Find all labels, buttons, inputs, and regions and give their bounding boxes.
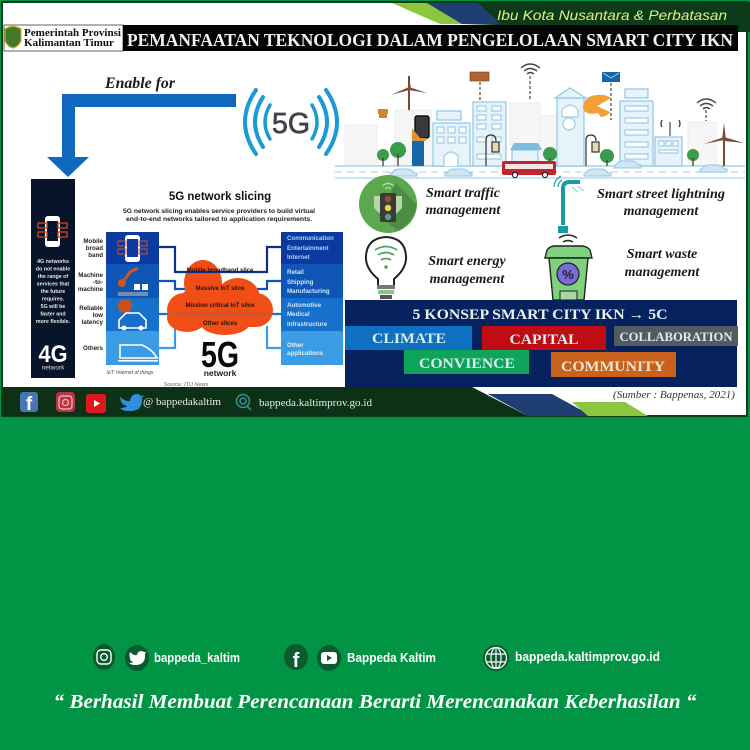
footer social row	[93, 644, 660, 672]
icon: smart waste bin: %	[562, 267, 574, 282]
orange sun	[583, 95, 611, 117]
hand with tablet	[412, 116, 429, 166]
slicing description: end-to-end networks tailored to application requirements.	[126, 216, 312, 223]
icon: instagram badge	[93, 644, 115, 670]
social handle: @ bappedakaltim	[143, 397, 221, 408]
4G description: 5G will be	[41, 304, 65, 310]
5G network wordmark: 5G	[201, 334, 239, 375]
panel: 5C concepts	[345, 300, 738, 387]
icon: smart energy bulb	[366, 237, 406, 299]
channel text: Bappeda Kaltim	[347, 650, 436, 665]
title: PEMANFAATAN TEKNOLOGI DALAM PENGELOLAAN SMART CITY IKN	[127, 30, 733, 50]
street lamps	[486, 135, 599, 166]
cars	[390, 161, 727, 176]
handle text: bappeda_kaltim	[154, 650, 240, 665]
icon: youtube badge	[317, 645, 341, 671]
application column: Internet	[287, 254, 310, 261]
website text: bappeda.kaltimprov.go.id	[515, 649, 660, 664]
5G wordmark: 5G	[272, 108, 310, 140]
icon: facebook badge: f	[293, 650, 300, 672]
use-case labels: Others	[83, 345, 104, 352]
city illustration	[335, 64, 745, 178]
icon: facebook badge	[284, 644, 308, 672]
slicing description: 5G network slicing enables service providers to build virtual	[123, 208, 315, 215]
tag: climate: CLIMATE	[372, 331, 446, 347]
mobile slice line	[159, 247, 281, 272]
label: smart energy: Smart energy	[428, 254, 506, 269]
slice labels: Mobile broadband slice	[187, 268, 254, 274]
4G wordmark: 4G	[38, 341, 68, 368]
chart: 5G network slicing	[78, 191, 343, 388]
use-case labels: Reliable	[79, 305, 104, 312]
plug icon	[378, 109, 388, 118]
use-case labels: latency	[82, 319, 104, 326]
bottom social banner	[2, 387, 648, 416]
label: smart street lighting: management	[624, 204, 699, 219]
label: smart waste: Smart waste	[627, 247, 697, 262]
slicing heading: 5G network slicing	[169, 191, 271, 203]
label: smart traffic: Smart traffic	[426, 186, 501, 201]
4G description: the future	[41, 289, 65, 295]
icon: web	[236, 394, 251, 410]
signs and wifi	[470, 64, 716, 136]
tag: community: COMMUNITY	[561, 359, 665, 375]
website: bappeda.kaltimprov.go.id	[259, 398, 373, 409]
application column: Communication	[287, 235, 334, 242]
arrow: 5G to 4G	[47, 94, 236, 177]
source note: (Sumber : Bappenas, 2021)	[613, 390, 736, 401]
icon: train	[118, 345, 158, 362]
icon: facebook	[20, 392, 38, 415]
icon: smart traffic	[359, 175, 417, 233]
label: smart waste: management	[625, 265, 700, 280]
panel: 4G network	[31, 179, 75, 378]
label: smart street lighting: Smart street lightning	[597, 187, 725, 202]
label: smart energy: management	[430, 272, 505, 287]
icon: instagram	[56, 392, 75, 412]
road	[335, 166, 745, 178]
panel heading: 5 KONSEP SMART CITY IKN → 5C	[412, 307, 668, 323]
icon: twitter	[120, 394, 144, 411]
4G description: 4G networks	[37, 259, 69, 265]
4G description: faster and	[40, 312, 66, 318]
network caption: network	[42, 364, 65, 372]
slice connectors	[159, 281, 281, 348]
application column: Automotive	[287, 302, 322, 309]
tag: capital	[482, 326, 606, 350]
government name: Pemerintah Provinsi	[24, 28, 121, 39]
use-case labels: broad	[86, 245, 103, 252]
4G description: the range of	[38, 274, 68, 280]
5G network wordmark: network	[204, 368, 237, 378]
emblem	[5, 26, 21, 48]
tag: convience	[404, 350, 529, 374]
title bar	[123, 25, 738, 51]
cloud: 5G slices	[159, 247, 281, 335]
application column: applications	[287, 350, 324, 357]
trees	[377, 142, 699, 166]
label: smart traffic: management	[426, 203, 501, 218]
4G description: services that	[37, 282, 69, 288]
use-case labels: band	[88, 252, 103, 259]
wind turbines	[391, 75, 744, 166]
application column: Retail	[287, 269, 304, 276]
white content panel	[2, 2, 747, 416]
application column: Other	[287, 342, 304, 349]
tag: community	[551, 352, 676, 377]
tag: collaboration: COLLABORATION	[620, 330, 732, 344]
4G description: do not enable	[36, 266, 70, 272]
government name: Kalimantan Timur	[24, 38, 115, 49]
use-case labels: -to-	[93, 279, 103, 286]
4G description: more flexible.	[36, 319, 71, 325]
use-case column	[106, 232, 159, 365]
application column: Manufacturing	[287, 288, 330, 295]
cloud: 5G slices: Massive IoT slice	[195, 286, 245, 292]
application column: Medical	[287, 311, 310, 318]
cloud: 5G slices: Other slices	[203, 321, 238, 327]
application column: Entertainment	[287, 245, 329, 252]
4G description: requires.	[42, 296, 65, 302]
use-case labels: Machine	[78, 272, 104, 279]
tagline: “ Berhasil Membuat Perencanaan Berarti Merencanakan Keberhasilan “	[54, 692, 697, 713]
government logo block	[4, 25, 123, 51]
top right banner	[390, 2, 750, 32]
icon: smart waste bin	[545, 235, 592, 300]
use-case labels: machine	[78, 286, 104, 293]
icon: phone slices	[38, 216, 67, 247]
icon: smart street lighting	[554, 176, 584, 233]
icon: car	[118, 299, 146, 330]
application column	[281, 232, 343, 365]
tag: capital: CAPITAL	[510, 332, 578, 348]
buildings	[433, 88, 682, 166]
enable for label: Enable for	[104, 75, 176, 92]
application column: Shipping	[287, 279, 314, 286]
icon: facebook: f	[26, 394, 33, 415]
use-case labels	[78, 238, 104, 352]
banner text: Ibu Kota Nusantara & Perbatasan	[497, 7, 727, 23]
bus	[502, 161, 556, 178]
application column: Infrastructure	[287, 321, 328, 328]
icon: phone	[118, 235, 147, 262]
icon: youtube	[86, 394, 106, 413]
tag: convience: CONVIENCE	[419, 356, 515, 372]
source: Source: ITU News	[164, 382, 209, 388]
icon: globe badge	[483, 645, 509, 671]
use-case labels: low	[93, 312, 103, 319]
use-case labels: Mobile	[83, 238, 104, 245]
tag: collaboration	[614, 326, 738, 346]
cloud: 5G slices: Mission critical IoT slice	[185, 303, 255, 309]
footnote: IoT: Internet of things	[107, 370, 154, 376]
faint background buildings	[345, 103, 716, 166]
icon: robot arm	[118, 268, 148, 296]
icon: twitter badge	[125, 645, 149, 671]
tag: climate	[345, 326, 472, 350]
icon: 5G signal	[245, 90, 337, 154]
